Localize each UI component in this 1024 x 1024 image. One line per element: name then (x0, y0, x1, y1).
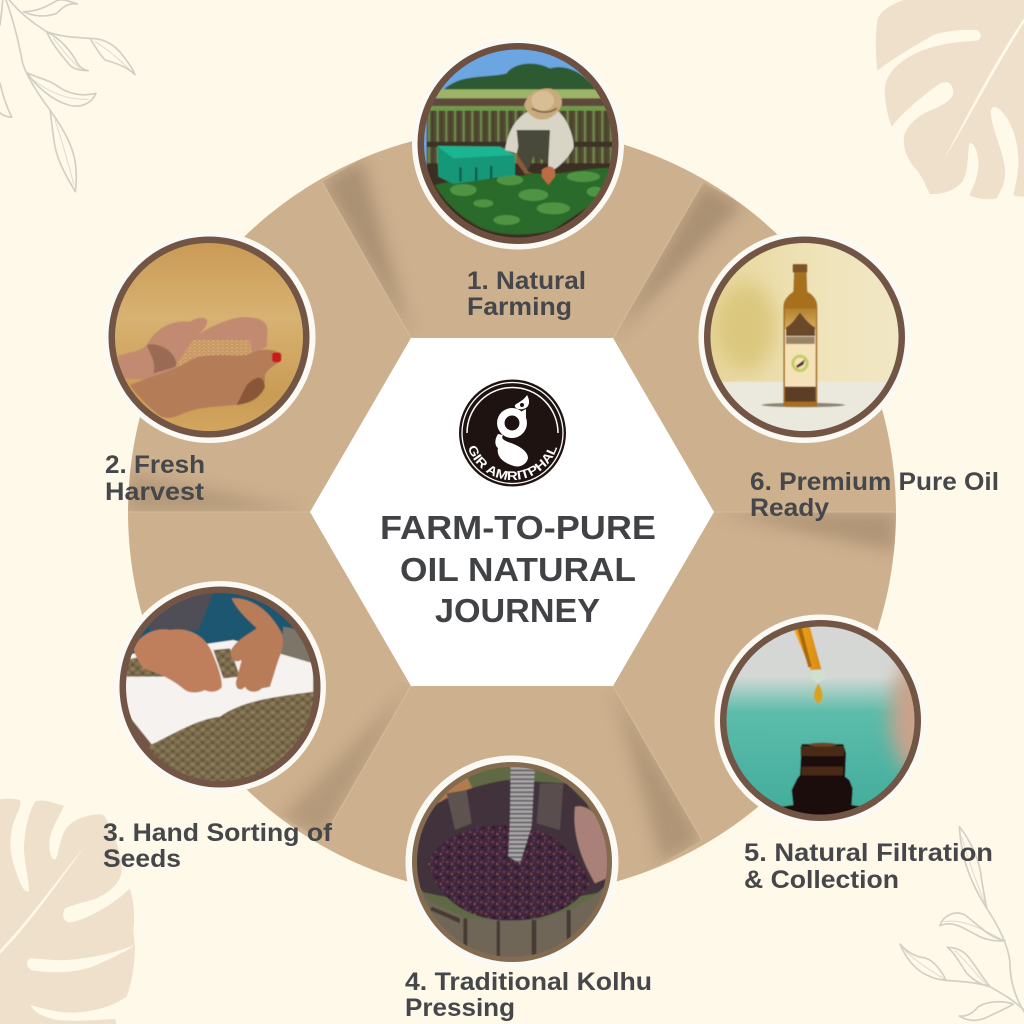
step 6 photo: premium pure oil bottle (698, 231, 910, 443)
step 3 photo: hand sorting of seeds (114, 581, 326, 793)
label: step 4 (405, 968, 652, 1022)
label: step 6 (750, 468, 999, 522)
decoration: line leaf sprig top left (0, 0, 135, 192)
label: step 3 (103, 819, 333, 873)
label: step 3: 3. Hand Sorting of (103, 819, 333, 847)
label: step 4: 4. Traditional Kolhu (405, 968, 652, 996)
decoration: line leaf sprig bottom right (900, 827, 1024, 1020)
label: step 2: Harvest (105, 478, 205, 506)
step 5 photo: natural filtration and collection (714, 614, 943, 827)
logo: Gir Amritphal: GIR AMRITPHAL (469, 446, 558, 480)
label: step 1: 1. Natural (467, 267, 586, 295)
central tan disc with fold seams (128, 128, 896, 896)
title: JOURNEY (435, 592, 600, 629)
decoration: monstera leaf bottom left (0, 799, 135, 1024)
white centre hexagon (310, 338, 714, 686)
title: OIL NATURAL (400, 551, 636, 588)
label: step 6: Ready (750, 494, 829, 522)
logo: Gir Amritphal (459, 380, 566, 486)
title: FARM-TO-PURE (380, 509, 656, 546)
label: step 5 (744, 839, 993, 894)
title (380, 509, 656, 629)
label: step 1: Farming (467, 293, 572, 321)
label: step 5: & Collection (744, 866, 899, 894)
decoration: monstera leaf top right (876, 0, 1024, 199)
label: step 6: 6. Premium Pure Oil (750, 468, 999, 496)
step 4 photo: traditional kolhu pressing (406, 756, 618, 968)
label: step 5: 5. Natural Filtration (744, 839, 993, 867)
step 1 photo: natural farming (412, 38, 624, 250)
step 2 photo: fresh harvest (104, 231, 316, 443)
label: step 2: 2. Fresh (105, 451, 205, 479)
label: step 3: Seeds (103, 845, 181, 873)
label: step 1 (467, 267, 586, 321)
label: step 4: Pressing (405, 994, 515, 1022)
label: step 2 (105, 451, 205, 506)
